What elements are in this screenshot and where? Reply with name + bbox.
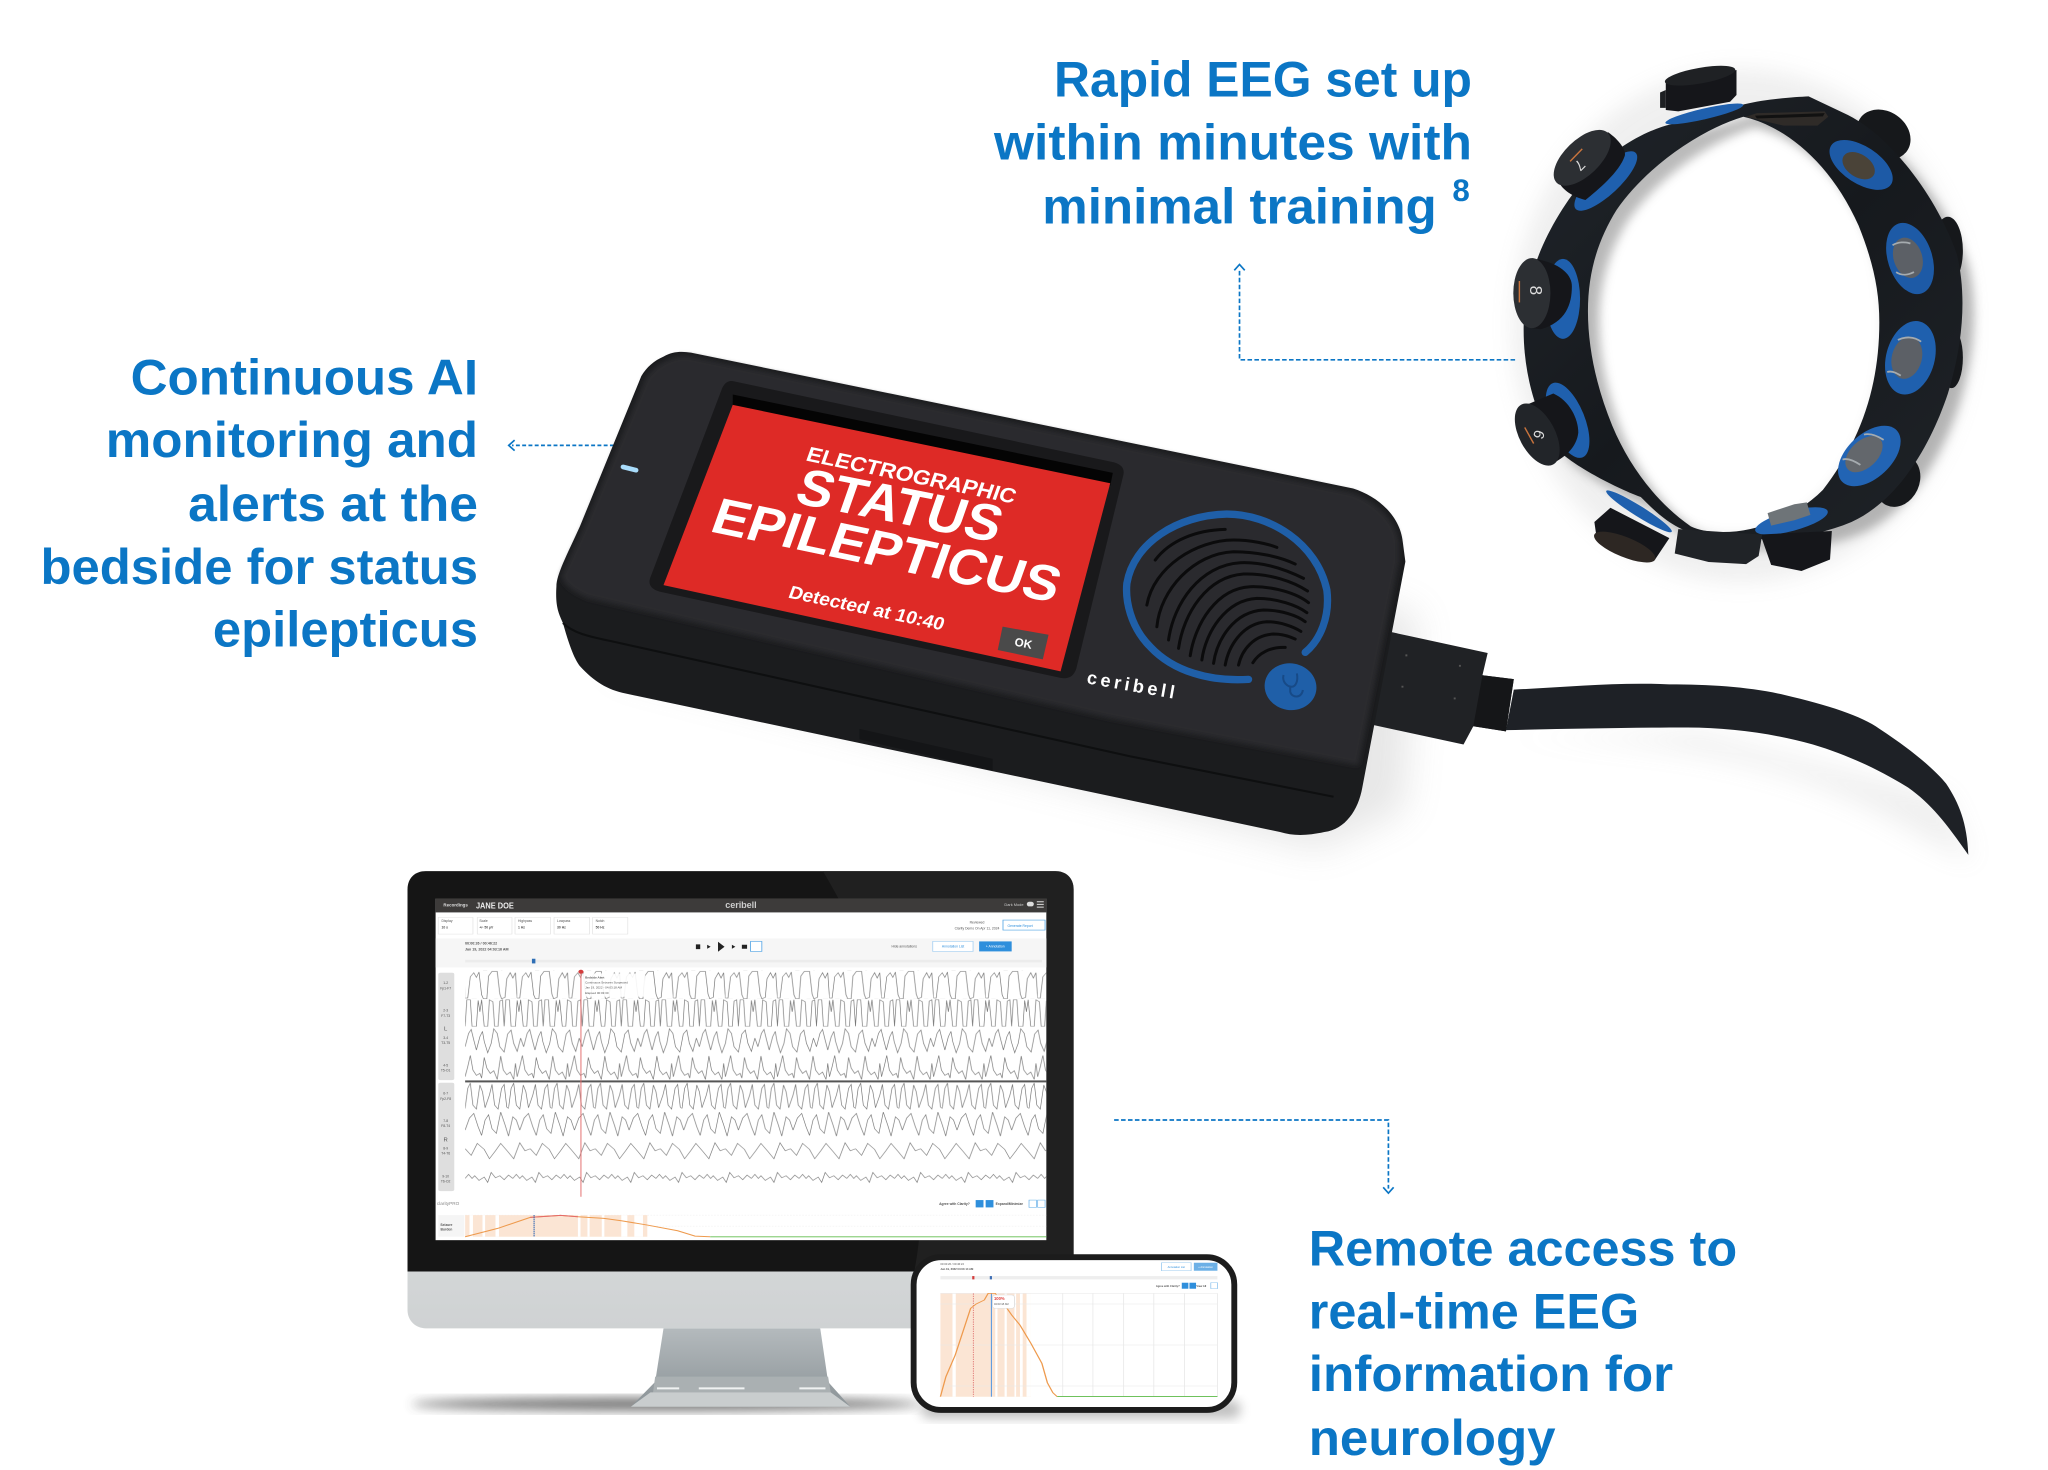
bedside alert tooltip: Jan 19, 2022 - 04:03:18 AM (585, 986, 623, 990)
cable shadow (1502, 731, 1972, 862)
speaker ridges (1147, 529, 1309, 665)
electrode knob 8: 8 (1526, 286, 1546, 295)
phone shadow (921, 1400, 1241, 1418)
desktop monitor (408, 871, 1074, 1411)
band drop shadow (1535, 107, 1974, 550)
phone text (940, 1262, 1213, 1306)
callout: rapid EEG set up: within minutes with (993, 114, 1472, 170)
filter controls text: Lowpass (557, 919, 571, 923)
channel labels: 4-5 (443, 1063, 448, 1067)
connector and ribbon cable (1373, 632, 1968, 855)
bedside monitoring device (556, 352, 1972, 862)
callout: remote access: real-time EEG (1309, 1283, 1639, 1339)
red alert screen: EPILEPTICUS (705, 488, 1069, 613)
band slot (1746, 111, 1828, 126)
filter controls text: 30 Hz (557, 926, 566, 930)
filter controls text: +/- 50 µV (479, 926, 494, 930)
monitor shadow (411, 1398, 921, 1411)
channel labels: 7-8 (443, 1119, 448, 1123)
filter controls text: 50 Hz (596, 926, 605, 930)
channel labels: 6-7 (443, 1092, 448, 1096)
top bar text: Dark Mode (1004, 902, 1024, 907)
electrode knob top (1660, 62, 1745, 128)
callout: continuous AI monitoring: monitoring and (106, 412, 478, 468)
callout: remote access: neurology (1309, 1410, 1556, 1466)
playback text: Annotation List (942, 944, 964, 948)
phone text: + Annotation (1198, 1265, 1213, 1269)
playback text: + Annotation (986, 944, 1005, 948)
playback text: 00:00:26 / 00:46:22 (465, 941, 497, 945)
filter controls text: Notch (596, 919, 605, 923)
clip connector (1675, 529, 1762, 564)
ceribell logo: ceribell (1085, 666, 1176, 703)
channel labels: 1-2 (443, 981, 448, 985)
callout: rapid EEG set up: minimal training (1042, 178, 1437, 234)
red alert screen (664, 405, 1110, 671)
channel labels: 2-3 (443, 1009, 448, 1013)
phone text: Jun 19, 2022 04:04:14 AM (940, 1267, 974, 1271)
electrode pads (1753, 130, 1944, 540)
filter controls text: Reviewed (970, 920, 985, 924)
playback text: Hide annotations (892, 944, 917, 948)
smartphone (914, 1257, 1241, 1418)
channel labels: F8-T4 (441, 1124, 450, 1128)
electrode knob 6: 6 (1529, 428, 1548, 441)
arrow: device to AI monitoring (509, 440, 614, 451)
callout: continuous AI monitoring: Continuous AI (131, 349, 478, 405)
red alert screen: Detected at 10:40 (786, 581, 948, 634)
callout: continuous AI monitoring: alerts at the (188, 476, 478, 532)
top bar text: Recordings (443, 902, 468, 907)
electrode knob 7 (1544, 120, 1645, 219)
playback text: Jan 19, 2022 04:03:16 AM (465, 947, 509, 951)
phone text: 100% (994, 1296, 1005, 1301)
arrow: headband to rapid set up (1234, 264, 1515, 360)
phone body (914, 1257, 1234, 1410)
seizure burden labels: Seizure (440, 1223, 453, 1227)
arrow: monitor to remote access (1114, 1120, 1394, 1193)
blue ring (1127, 514, 1328, 680)
channel labels: 8-9 (443, 1146, 448, 1150)
OK button (998, 627, 1049, 659)
callout: continuous AI monitoring (40, 349, 478, 658)
filter controls text: Generate Report (1008, 924, 1033, 928)
top bar text: JANE DOE (476, 900, 514, 910)
phone text: 00:00:26 / 00:46:22 (940, 1262, 964, 1266)
speaker and status ring (1127, 514, 1328, 714)
device face (562, 356, 1399, 765)
bezel (408, 871, 1074, 1272)
channel labels: Fp1-F7 (440, 986, 451, 990)
screen (436, 898, 1046, 1240)
playback text (465, 941, 1005, 951)
bedside alert tooltip (585, 975, 628, 995)
channel labels: R (444, 1138, 448, 1144)
red alert screen: STATUS (789, 458, 1011, 554)
bedside alert tooltip: Bedside Alert (585, 975, 604, 979)
channel labels: Fp2-F8 (440, 1097, 451, 1101)
status LED (623, 467, 636, 470)
filter controls text: Display (441, 919, 453, 923)
bottom slot (859, 729, 993, 771)
top bar text: ceribell (725, 900, 757, 910)
electrode knob bottom left (1591, 486, 1675, 569)
filter controls text: 10 s (441, 926, 448, 930)
channel labels: F7-T3 (441, 1014, 450, 1018)
callout: rapid EEG set up: 8 (1452, 173, 1470, 208)
callout: rapid EEG set up (993, 52, 1472, 234)
filter controls text: Scale (479, 919, 488, 923)
channel labels: T4-T6 (441, 1152, 450, 1156)
screen bezel (649, 381, 1124, 678)
seizure burden labels (437, 1201, 1023, 1231)
stand (631, 1328, 850, 1407)
filter controls text (441, 919, 1033, 930)
channel labels: T3-T5 (441, 1041, 450, 1045)
bedside alert tooltip: Continuous Seizures Suspected (585, 981, 628, 985)
seizure burden labels: Agree with Clarity? (939, 1202, 970, 1206)
screen graphics (436, 898, 1046, 1237)
phone chart (940, 1263, 1217, 1397)
back knobs (1847, 99, 1963, 514)
callout: rapid EEG set up: Rapid EEG set up (1054, 52, 1472, 108)
channel labels: T6-O2 (441, 1180, 451, 1184)
callout: continuous AI monitoring: epilepticus (213, 602, 478, 658)
phone text: 04:03:18 AM (994, 1302, 1009, 1306)
seizure burden labels: Expand/Minimize (996, 1202, 1023, 1206)
OK button: OK (1013, 636, 1034, 652)
electrode knob bottom (1760, 531, 1832, 571)
callout: remote access: Remote access to (1309, 1221, 1737, 1277)
callout: continuous AI monitoring: bedside for status (40, 539, 478, 595)
device body (556, 352, 1405, 835)
channel labels (440, 981, 451, 1184)
channel labels: L (444, 1027, 448, 1033)
filter controls text: Clarity Demo On Apr 11, 2024 (955, 926, 999, 930)
band (1524, 96, 1962, 539)
electrode knob 8 (1513, 258, 1580, 339)
phone text: Agree with Clarity? (1156, 1284, 1180, 1288)
callout: remote access (1309, 1221, 1737, 1466)
seizure burden labels: clarityPRO (437, 1201, 460, 1206)
phone text: Annotation List (1168, 1265, 1185, 1269)
device shadow (614, 457, 1417, 849)
channel labels: 3-4 (443, 1036, 448, 1040)
callout: remote access: information for (1309, 1346, 1673, 1402)
filter controls text: Highpass (518, 919, 532, 923)
chin (408, 1271, 1074, 1328)
top bar text (443, 900, 1024, 910)
electrode knob 7: 7 (1570, 156, 1588, 174)
bedside alert tooltip: Elapsed 00:03:30 (585, 991, 609, 995)
channel labels: T5-O1 (441, 1069, 451, 1073)
red alert screen: ELECTROGRAPHIC (803, 443, 1019, 508)
channel labels: 9-10 (442, 1174, 449, 1178)
seizure burden labels: Burden (441, 1227, 452, 1231)
stethoscope button (1261, 659, 1320, 714)
filter controls text: 1 Hz (518, 926, 525, 930)
headband electrode ring (1506, 62, 1974, 583)
phone text: View All (1196, 1284, 1207, 1288)
electrode knob 6 (1506, 377, 1598, 473)
